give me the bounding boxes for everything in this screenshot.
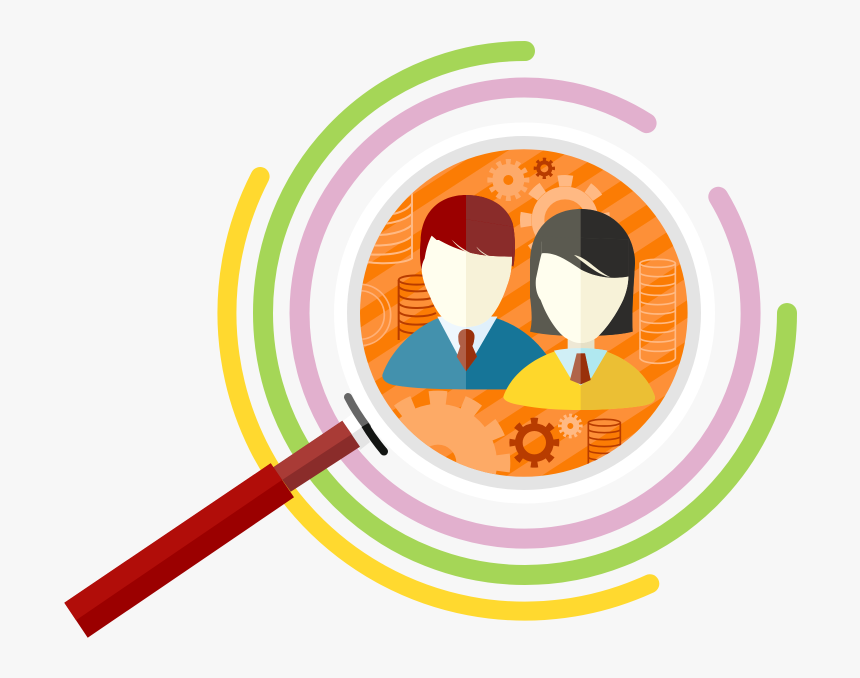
man: shirt — [437, 316, 498, 354]
woman: back hair — [530, 209, 635, 336]
woman: jacket — [503, 352, 655, 410]
lens: striped orange disc — [360, 149, 688, 477]
gear: small dark top — [534, 158, 555, 179]
woman: neck — [568, 339, 594, 349]
gear: large pale behind woman — [520, 175, 610, 250]
magnifier: rim highlight black — [365, 425, 388, 456]
gear: small light top — [488, 160, 529, 200]
woman: tie — [570, 353, 591, 384]
man: face — [422, 236, 512, 327]
arc: yellow — [227, 176, 650, 611]
coins: pale stack top left — [367, 193, 412, 263]
coins: dark stack left — [399, 275, 436, 340]
magnifier: handle — [64, 463, 294, 638]
gear: small pale bottom — [559, 414, 582, 438]
man: jacket — [382, 318, 547, 389]
arc: green — [263, 51, 787, 575]
woman: face — [536, 242, 628, 343]
magnifier: collar — [342, 413, 370, 450]
infographic: magnifying glass with concentric arcs — [64, 41, 797, 638]
woman: shirt — [554, 348, 607, 385]
concentric circles: left — [362, 284, 392, 346]
man: tie — [457, 329, 477, 371]
woman: fringe — [542, 237, 629, 278]
magnifier: rim highlight grey — [348, 397, 367, 427]
gear: large bottom left — [394, 390, 510, 474]
coins: pale stack right — [640, 259, 675, 363]
lens: grey inner ring — [347, 136, 701, 490]
man: back hair — [420, 195, 515, 272]
magnifier: neck — [273, 421, 360, 492]
man: fringe — [432, 217, 513, 257]
arc: pink — [300, 88, 751, 539]
lens: white outer ring — [334, 122, 715, 504]
lens contents — [329, 158, 675, 536]
coins: dark stack bottom — [588, 419, 620, 465]
person: man — [382, 195, 547, 389]
gear: dark bottom — [510, 418, 559, 467]
person: woman — [503, 209, 655, 410]
